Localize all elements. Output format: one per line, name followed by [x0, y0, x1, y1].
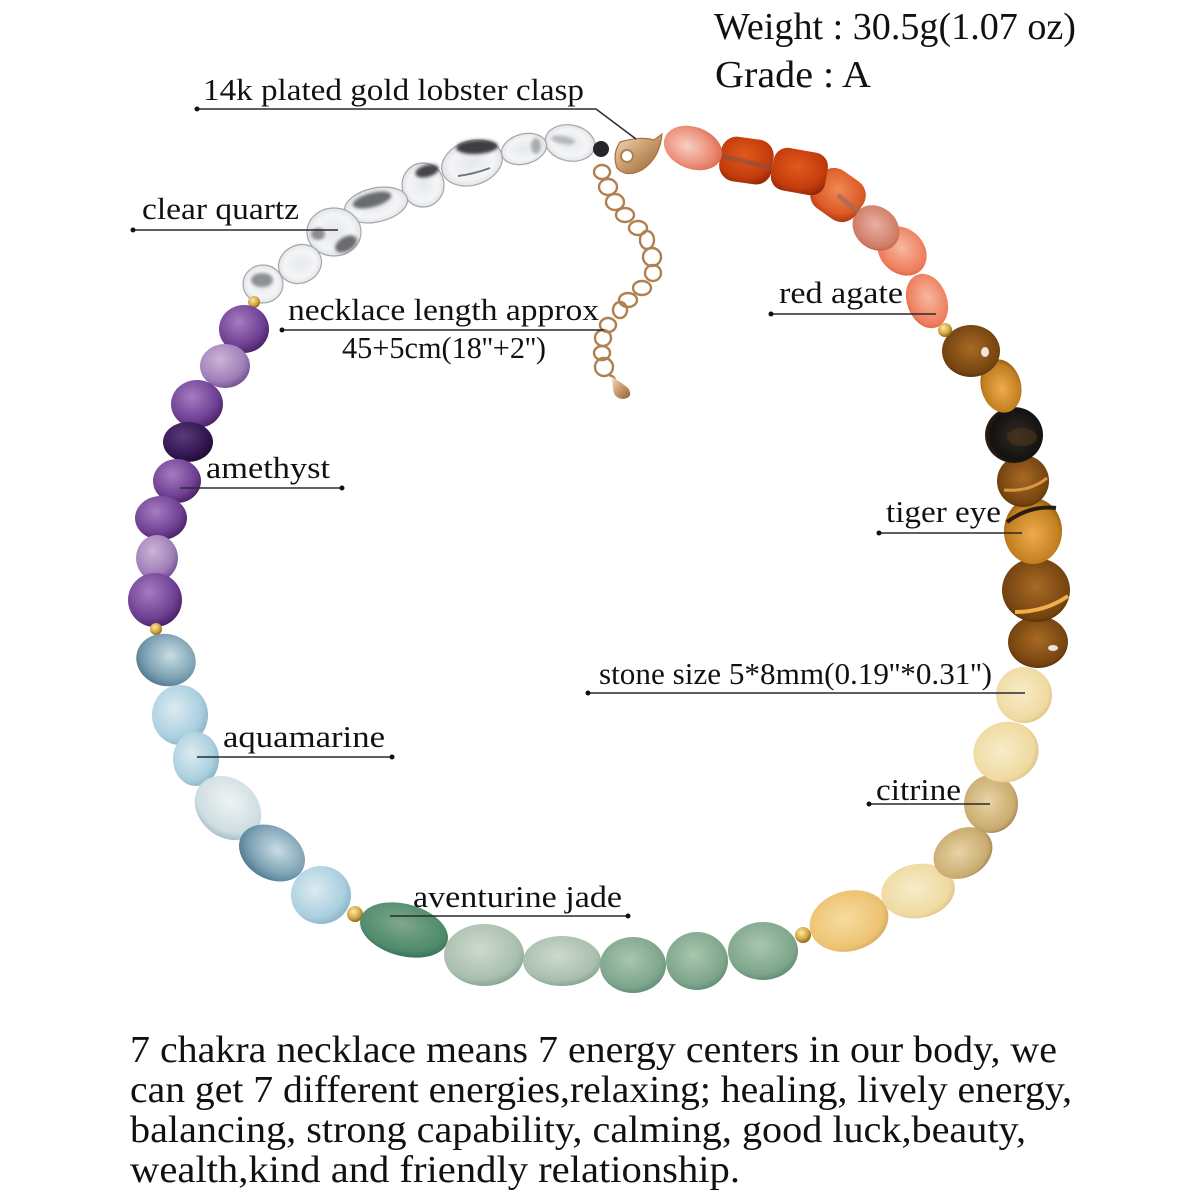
spec: weight and grade: Grade : A — [715, 54, 872, 96]
label: necklace length — [280, 292, 604, 365]
spec: weight and grade: Weight : 30.5g(1.07 oz) — [714, 6, 1076, 48]
label: tiger eye: tiger eye — [886, 494, 1001, 529]
label: amethyst — [180, 450, 344, 490]
label: clear quartz — [130, 191, 338, 232]
label: aquamarine: aquamarine — [223, 719, 385, 754]
description text: can get 7 different energies,relaxing; healing, lively energy, — [130, 1069, 1072, 1111]
label: aquamarine — [197, 719, 394, 760]
beads: tiger eye — [942, 325, 1070, 668]
label: lobster clasp — [194, 72, 636, 139]
label: tiger eye — [876, 494, 1022, 536]
description text: balancing, strong capability, calming, good luck,beauty, — [130, 1109, 1026, 1151]
description text — [130, 1029, 1072, 1191]
label: stone size: stone size 5*8mm(0.19''*0.31'') — [599, 656, 992, 691]
beads: citrine — [803, 667, 1052, 960]
label: necklace length: 45+5cm(18''+2'') — [342, 330, 546, 365]
beads: clear quartz — [243, 121, 598, 303]
label: red agate: red agate — [779, 275, 903, 310]
beads: aventurine jade — [354, 893, 811, 993]
label: aventurine jade: aventurine jade — [413, 879, 622, 914]
label: citrine: citrine — [876, 772, 961, 807]
lobster clasp — [593, 134, 662, 174]
label: necklace length: necklace length approx — [288, 292, 600, 327]
label: red agate — [768, 275, 936, 316]
description text: wealth,kind and friendly relationship. — [130, 1149, 740, 1191]
spec: weight and grade — [714, 6, 1076, 96]
chain extender — [594, 165, 661, 399]
beads: amethyst — [128, 296, 269, 635]
beads: aquamarine — [130, 627, 363, 924]
label: lobster clasp: 14k plated gold lobster clasp — [203, 72, 584, 107]
description text: 7 chakra necklace means 7 energy centers in our body, we — [130, 1029, 1057, 1071]
chain drop charm — [612, 377, 630, 399]
label: clear quartz: clear quartz — [142, 191, 299, 226]
label: citrine — [866, 772, 990, 807]
necklace — [128, 118, 1070, 993]
beads: red agate — [658, 118, 955, 337]
label: amethyst: amethyst — [206, 450, 330, 485]
